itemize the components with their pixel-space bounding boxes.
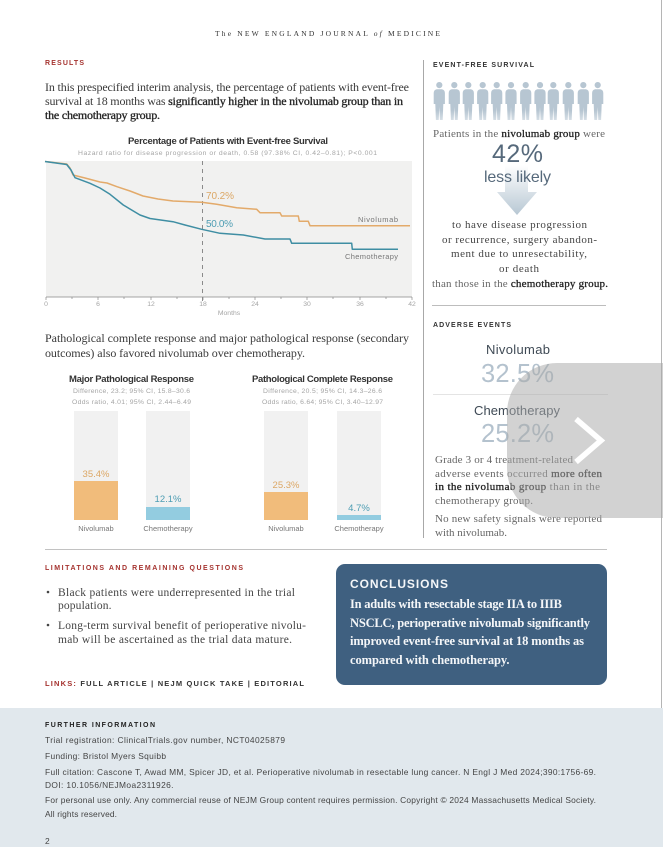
text: conclusion statement: NSCLC, perioperative nivolumab significantly	[350, 616, 591, 630]
text: outcome description: ment due to unresectability,	[451, 248, 587, 260]
bar: chemotherapy 4.7%	[334, 411, 384, 533]
text: full citation	[45, 767, 596, 790]
text: interim analysis summary: survival at 18 months was significantly higher in the nivolumab group than in	[45, 94, 403, 108]
text: conclusion statement: compared with chemotherapy.	[350, 653, 510, 667]
label: 50.0%: 50.0%	[206, 219, 233, 230]
chart subtitle: Hazard ratio for disease progression or death, 0.58 (97.38% CI, 0.42–0.81); P<0.001	[78, 150, 377, 157]
chart title: Major Pathological Response	[69, 374, 194, 385]
bullet: long-term survival	[47, 620, 306, 646]
heading: conclusions: CONCLUSIONS	[350, 577, 448, 591]
label: 70.2%: 70.2%	[206, 191, 234, 202]
x axis	[44, 297, 416, 317]
chart title: Pathological Complete Response	[252, 374, 393, 385]
text: full citation: DOI: 10.1056/NEJMoa2311926.	[45, 780, 174, 790]
text: safety signals: with nivolumab.	[435, 527, 507, 539]
label: nivolumab: Nivolumab	[486, 342, 550, 357]
bar: nivolumab 25.3%: Nivolumab	[268, 524, 304, 533]
bullet: underrepresentation	[47, 587, 295, 612]
panel: further information	[0, 708, 663, 847]
bullet: underrepresentation: population.	[58, 600, 112, 612]
curve: nivolumab	[45, 162, 410, 226]
text: interim analysis summary: In this prespecified interim analysis, the percentage of patients with event-free	[45, 80, 409, 94]
panel: conclusions	[336, 564, 607, 685]
bar: chemotherapy 4.7%: 4.7%	[348, 503, 370, 514]
text: patients in nivolumab group: Patients in the nivolumab group were	[433, 128, 605, 140]
statistics: Difference, 23.2; 95% CI, 15.8–30.6	[73, 388, 190, 395]
journal masthead: The NEW ENGLAND JOURNAL of MEDICINE	[215, 29, 440, 38]
chart: major pathological response: Odds ratio, 4.01; 95% CI, 2.44–6.49	[72, 399, 191, 406]
text: grade 3 or 4 events: in the nivolumab group than in the	[435, 481, 600, 493]
bar: chemotherapy 4.7%: Chemotherapy	[334, 524, 384, 533]
heading: limitations: LIMITATIONS AND REMAINING QUESTIONS	[45, 565, 243, 572]
text: grade 3 or 4 events: chemotherapy group.	[435, 495, 533, 507]
18-month marker line	[202, 161, 204, 305]
x axis: 18	[199, 301, 207, 308]
text: grade 3 or 4 events: Grade 3 or 4 treatment-related	[435, 454, 574, 466]
statistics: Difference, 20.5; 95% CI, 14.3–26.6	[263, 388, 382, 395]
text: interim analysis summary: the chemotherapy group.	[45, 108, 160, 122]
x axis: 6	[96, 301, 100, 308]
heading: results: RESULTS	[45, 60, 84, 67]
icon: chevron	[576, 419, 601, 462]
bar: chemotherapy 12.1%: Chemotherapy	[143, 524, 193, 533]
text: copyright	[45, 795, 596, 819]
text: safety signals: No new safety signals were reported	[435, 513, 602, 525]
x axis: 24	[251, 301, 259, 308]
chart: pathological complete response: Odds ratio, 6.64; 95% CI, 3.40–12.97	[262, 399, 383, 406]
x axis: 30	[303, 301, 311, 308]
text: conclusion statement: In adults with resectable stage IIA to IIIB	[350, 597, 562, 611]
text: conclusion statement	[350, 597, 591, 667]
icon: row of patients	[434, 82, 603, 120]
bullet: underrepresentation: Black patients were underrepresented in the trial	[58, 587, 295, 599]
icon: down arrow	[497, 165, 537, 215]
text: safety signals	[435, 513, 602, 539]
text: funding: Funding: Bristol Myers Squibb	[45, 751, 166, 761]
text: outcome description: or death	[499, 263, 540, 275]
links: LINKS: FULL ARTICLE | NEJM QUICK TAKE | EDITORIAL	[45, 679, 304, 688]
text: conclusion statement: improved event-free survival at 18 months as	[350, 634, 584, 648]
statistic: 32.5%: 32.5%	[481, 360, 554, 388]
page number: 2	[45, 836, 50, 846]
label: chemotherapy: Chemotherapy	[474, 403, 560, 418]
text: outcome description: to have disease progression	[452, 219, 588, 231]
heading: further information: FURTHER INFORMATION	[45, 722, 155, 729]
x axis: 36	[356, 301, 364, 308]
overlay: next-page button	[507, 363, 663, 518]
text: outcome description: or recurrence, surgery abandon-	[442, 234, 597, 246]
chart: pathological complete response	[252, 374, 393, 533]
bar: nivolumab 25.3%	[264, 411, 308, 533]
panel: adverse events	[433, 322, 608, 539]
bar: chemotherapy 12.1%	[143, 411, 193, 533]
plot background	[46, 161, 412, 297]
x axis: Months	[218, 310, 241, 317]
text: full citation: Full citation: Cascone T, Awad MM, Spicer JD, et al. Perioperative nivolumab in resectable lung cancer. N Engl J Med 2024;390:1756-69.	[45, 767, 596, 777]
heading: event-free survival: EVENT-FREE SURVIVAL	[433, 62, 535, 69]
chart: event-free survival curves	[44, 136, 416, 317]
statistic: less likely: less likely	[484, 169, 551, 186]
bar: chemotherapy 12.1%: 12.1%	[155, 494, 182, 505]
text: secondary outcomes: Pathological complete response and major pathological response (secondary	[45, 331, 409, 345]
text: secondary outcomes: outcomes) also favored nivolumab over chemotherapy.	[45, 346, 305, 360]
text: grade 3 or 4 events	[435, 454, 602, 507]
bar: nivolumab 35.4%	[74, 411, 118, 533]
curve: chemotherapy	[45, 162, 398, 249]
text: copyright: For personal use only. Any commercial reuse of NEJM Group content requires permission. Copyright © 2024 Massachusetts Medical Society.	[45, 795, 596, 805]
label: chemotherapy: Chemotherapy	[345, 252, 398, 261]
text: outcome description	[432, 219, 608, 290]
heading: adverse events: ADVERSE EVENTS	[433, 322, 511, 329]
bar: nivolumab 35.4%: Nivolumab	[78, 524, 114, 533]
chart title: Percentage of Patients with Event-free Survival	[128, 136, 328, 147]
text: copyright: All rights reserved.	[45, 809, 117, 819]
text: secondary outcomes	[45, 331, 409, 360]
bullet: long-term survival: Long-term survival benefit of perioperative nivolu-	[58, 620, 306, 632]
label: nivolumab: Nivolumab	[358, 215, 398, 224]
panel: results	[44, 60, 416, 533]
statistic: 25.2%: 25.2%	[481, 420, 554, 448]
bullet: long-term survival: mab will be ascertained as the trial data mature.	[58, 634, 292, 646]
text: trial registration: Trial registration: ClinicalTrials.gov number, NCT04025879	[45, 735, 285, 745]
text: interim analysis summary	[45, 80, 409, 122]
panel: event-free survival	[432, 62, 608, 290]
bar: nivolumab 35.4%: 35.4%	[83, 469, 110, 480]
text: outcome description: than those in the chemotherapy group.	[432, 278, 608, 290]
text: grade 3 or 4 events: adverse events occurred more often	[435, 468, 602, 480]
panel: limitations	[45, 565, 306, 688]
statistic: 42%: 42%	[492, 140, 543, 168]
x axis: 12	[147, 301, 155, 308]
chart: major pathological response	[69, 374, 194, 533]
x axis: 42	[408, 301, 416, 308]
bar: nivolumab 25.3%: 25.3%	[273, 480, 300, 491]
x axis: 0	[44, 301, 48, 308]
